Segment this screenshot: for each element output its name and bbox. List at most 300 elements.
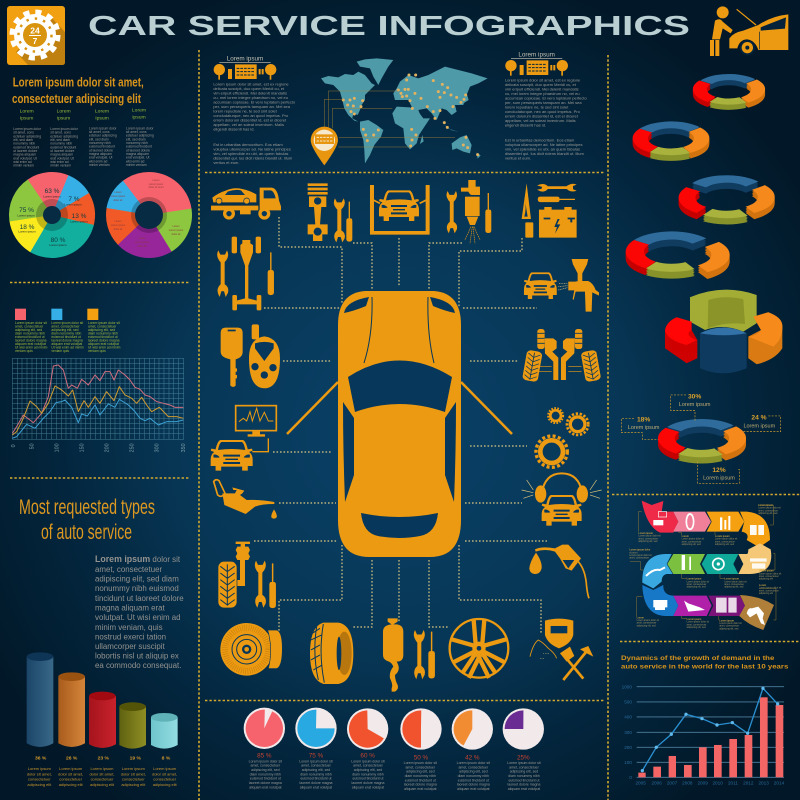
- callout labels: 18%: [637, 416, 650, 423]
- column 2: nonummy nibh: [50, 142, 72, 146]
- axis labels: 250: [129, 443, 135, 452]
- text block: most requested types: ea commodo consequat.: [95, 661, 181, 670]
- legend notes: veniam quis: [51, 349, 69, 353]
- right text: per, sum persequeris tamquam an. Mei sea: [505, 100, 582, 105]
- column 3: minim veniam: [89, 163, 110, 167]
- heading: growth of demand: Dynamics of the growth of demand in the: [621, 655, 775, 662]
- pie 60%: [347, 708, 388, 760]
- pie chart: segments with notes: Lorem ipsum: [135, 241, 149, 244]
- pie chart: percentages: 63 %: [45, 188, 60, 195]
- pie captions: laoreet dolore magna: [457, 783, 490, 787]
- heading: growth of demand: [621, 655, 789, 671]
- process notes: Lorem: [759, 585, 766, 587]
- x axis labels: 2011: [728, 781, 738, 786]
- column 1: nonummy nibh: [13, 142, 35, 146]
- legend notes: diam nonummy nibh: [51, 331, 81, 335]
- pie chart: percentages: Lorem ipsum: [18, 230, 36, 234]
- process notes: adipiscing elit, sed: [687, 586, 706, 589]
- column 4: [126, 108, 154, 167]
- icon: wrench: [217, 250, 228, 297]
- y axis labels: [622, 685, 632, 780]
- icon: welding mask and hammers: [530, 619, 593, 680]
- axis labels: 200: [104, 443, 110, 452]
- process notes: Lorem ipsum dolor sit: [687, 621, 709, 624]
- icon: gears: [536, 408, 588, 467]
- legend notes: Lorem ipsum dolor sit: [51, 321, 83, 325]
- text block: most requested types: dolor sit: [150, 555, 181, 564]
- process notes: adipiscing elit, sed: [719, 627, 739, 630]
- pie chart: percentages: Lorem ipsum: [43, 194, 61, 198]
- pie captions: Lorem ipsum dolor sit: [404, 761, 437, 765]
- pie captions: laoreet dolore magna: [249, 781, 282, 785]
- captions: adipiscing elit: [90, 782, 115, 787]
- captions: consectetuer: [28, 777, 51, 782]
- legend notes: aliquam erat volutpat: [15, 342, 46, 346]
- axis labels: 0: [11, 444, 17, 447]
- captions: Lorem ipsum: [59, 766, 83, 771]
- pie captions: aliquam erat volutpat: [508, 787, 540, 791]
- right heading with icons: Lorem ipsum: [518, 52, 555, 59]
- column 1: Lorem ipsum dolor: [13, 127, 42, 131]
- pie chart: percentages: Lorem ipsum: [64, 202, 82, 206]
- process notes: adipiscing elit, sed: [715, 543, 735, 546]
- main car top view: [287, 291, 512, 557]
- legend notes: laoreet dolore magna: [51, 338, 83, 342]
- y axis labels: 400: [624, 715, 632, 720]
- process notes: amet, consectetuer: [629, 557, 649, 560]
- column 1: ut laoreet dolore: [13, 149, 38, 153]
- process notes: amet, consectetuer: [759, 589, 779, 592]
- legend notes: Ut wisi enim ad minim: [88, 345, 121, 349]
- process notes: adipiscing elit, sed: [638, 540, 658, 543]
- y axis labels: 500: [624, 700, 632, 705]
- legend notes: Lorem ipsum dolor sit: [88, 321, 120, 325]
- text block: most requested types: amet, consectetuer: [95, 565, 162, 574]
- callout labels: 24 %: [751, 415, 767, 422]
- panel: percentage pies: [244, 708, 544, 791]
- process notes: amet, consectetuer: [638, 537, 658, 540]
- icon: tyre side: [310, 623, 353, 684]
- pie chart: segments with notes: Lorem ipsum: [111, 224, 125, 227]
- pie captions: euismod tincidunt ut: [250, 777, 281, 781]
- pie captions: amet, consectetuer: [405, 765, 436, 769]
- x axis labels: 2005: [635, 781, 646, 786]
- legend notes: Lorem ipsum dolor sit: [15, 321, 47, 325]
- icon: piston: [308, 183, 328, 241]
- column 1: sit amet, cons: [13, 131, 34, 135]
- process leader lines: [630, 505, 776, 620]
- process notes: amet, consectetuer: [682, 540, 702, 543]
- pie captions: aliquam erat volutpat: [352, 785, 384, 789]
- icon: wrench: [255, 561, 266, 608]
- captions: Lorem ipsum: [90, 766, 114, 771]
- icon: horizontal wrench: [537, 184, 577, 192]
- process notes: amet, consectetuer: [687, 583, 707, 586]
- pie captions: laoreet dolore magna: [300, 781, 333, 785]
- legend notes: euismod tincidunt ut: [51, 335, 81, 339]
- pie chart: segments with notes: dolor sit: [172, 233, 181, 236]
- icon: 24/7 gear badge: 7: [33, 36, 38, 46]
- icon: fuel nozzle: [529, 545, 589, 598]
- column 1: minim veniam: [13, 164, 34, 168]
- pie captions: aliquam erat volutpat: [300, 785, 332, 789]
- column 4: ipsum: [132, 115, 146, 121]
- world map: [321, 58, 488, 163]
- cylinder 26%: [58, 672, 85, 747]
- column 2: [50, 108, 79, 168]
- pie captions: adipiscing elit, sed: [459, 770, 488, 774]
- left text: concludaturque, nec an quod impetus. Pro: [213, 113, 289, 118]
- process notes: Lorem ipsum dolor sit: [759, 572, 782, 575]
- icon: wrench: [446, 191, 457, 233]
- connector lines: [324, 91, 455, 147]
- text columns: lorem ipsum: [13, 108, 154, 168]
- map continents: [321, 58, 488, 163]
- process notes: adipiscing elit, sed: [637, 624, 656, 627]
- text block: most requested types: magna aliquam erat: [95, 604, 166, 612]
- pie captions: Lorem ipsum dolor sit: [507, 761, 541, 765]
- pie chart: percentages: 18 %: [20, 224, 35, 231]
- icon: alloy wheel: [450, 619, 508, 678]
- heading: left intro: [12, 74, 144, 106]
- left text: vim, vel splendide ex ubi, an quem fabulas: [213, 151, 288, 156]
- pie captions: amet, consectetuer: [251, 764, 281, 768]
- legend notes: Ut wisi enim ad minim: [51, 345, 84, 349]
- right text: errem dolorum dissentiet id, est ei diceret: [505, 113, 579, 118]
- text block: most requested types: minim veniam, quis: [95, 623, 163, 632]
- callout leaders: [621, 395, 781, 483]
- captions: consectetuer: [122, 777, 145, 782]
- process notes: Lorem ipsum dolor sit: [719, 622, 742, 625]
- value labels: [35, 755, 171, 761]
- icon: brake disc: [220, 623, 282, 676]
- pie chart: percentages: 75 %: [19, 207, 34, 214]
- text block: most requested types: lobortis nisl ut aliquip ex: [95, 652, 179, 660]
- pie chart: percentages: Lorem ipsum: [70, 220, 88, 224]
- legend notes: adipiscing elit, sed: [15, 328, 42, 332]
- process notes: amet, consectetuer: [724, 583, 744, 586]
- donut 4: [620, 229, 735, 284]
- legend notes: aliquam erat volutpat: [88, 342, 119, 346]
- x axis labels: 2014: [774, 781, 785, 786]
- x axis labels: 2008: [682, 781, 693, 786]
- axis labels: 100: [54, 443, 60, 452]
- pie captions: adipiscing elit, sed: [302, 768, 330, 772]
- map pins: [342, 73, 479, 156]
- left text: veritus et eum.: [213, 160, 239, 165]
- icon: tyre with shock absorber: [218, 542, 250, 608]
- callout labels: [628, 394, 776, 482]
- icon: 24/7 gear badge: 24: [30, 26, 40, 36]
- icon: tow truck: [211, 188, 281, 220]
- column 2: sit amet, cons: [50, 131, 71, 135]
- left heading with icons: Lorem ipsum: [227, 56, 263, 63]
- legend notes: adipiscing elit, sed: [88, 328, 115, 332]
- pie chart: segments with notes: Lorem ipsum: [111, 195, 125, 198]
- location pin: [311, 127, 338, 165]
- pie 85%: [244, 708, 285, 760]
- pie 75%: 75 %: [309, 753, 324, 760]
- column 2: magna aliquam: [50, 153, 73, 157]
- captions: adipiscing elit: [153, 782, 178, 787]
- pie 60%: 60 %: [360, 753, 375, 760]
- column 3: magna aliquam: [89, 152, 112, 156]
- captions: [27, 766, 178, 787]
- panel: process snake and growth chart: [621, 501, 789, 786]
- cylinder 36%: [27, 652, 53, 747]
- process notes: Lorem ipsum: [687, 579, 701, 581]
- axis labels: 350: [181, 443, 187, 452]
- right text: eligendi dissenti has id.: [505, 122, 546, 127]
- process notes: Lorem ipsum: [724, 579, 739, 581]
- pie 50%: [400, 708, 442, 762]
- text block: most requested types: nostrud exerci tation: [95, 632, 166, 642]
- bars: [638, 697, 783, 777]
- column 3: elit, sed diam: [89, 137, 109, 141]
- left text: lorem repudiare ne, te sed sint solet: [213, 108, 278, 113]
- pie chart: percentages: 13 %: [72, 213, 87, 220]
- column 2: Lorem ipsum dolor: [50, 127, 79, 131]
- icon: mechanic with car: [710, 6, 788, 56]
- bar and line chart: [622, 685, 785, 786]
- captions: adipiscing elit: [27, 782, 52, 787]
- right text: dissentiet qui. Ius dicit ridens blandit ut. Illum: [505, 151, 584, 156]
- value labels: 19 %: [130, 755, 142, 761]
- icon: jumper clamp: [522, 183, 533, 238]
- icon: battery: [539, 207, 577, 238]
- icon: car key: [221, 328, 243, 387]
- pie chart: percentages: [17, 185, 88, 247]
- pie chart: segments with notes: Lorem ipsum: [169, 229, 183, 232]
- icon: wrench: [334, 198, 345, 242]
- value labels: 23 %: [98, 755, 110, 761]
- column 3: Ipsum: [95, 115, 109, 121]
- panel: world map and text: [213, 52, 587, 165]
- icon: horizontal screwdriver: [538, 197, 575, 202]
- icon: screwdriver: [485, 193, 491, 233]
- process notes: amet, consectetuer: [715, 540, 735, 543]
- icon: injector: [461, 180, 480, 243]
- right heading with icons: [505, 52, 568, 76]
- icon: car front: [524, 272, 557, 299]
- pie chart: percentages: 80 %: [51, 237, 66, 244]
- pie 42%: [452, 708, 493, 762]
- pie captions: euismod tincidunt ut: [352, 777, 384, 781]
- pie chart: percentages: 7 %: [68, 196, 80, 203]
- column 3: sit amet, cons: [89, 130, 110, 134]
- callout labels: 30%: [688, 394, 701, 401]
- process notes: amet, consectetuer: [687, 623, 707, 626]
- pie chart: percentages: Lorem ipsum: [17, 214, 35, 218]
- pie chart: segments with notes: dolor sit amet: [148, 186, 164, 189]
- right text: accumsan copiosae. Ei vero luptatum perfecto: [505, 95, 587, 100]
- process notes: Lorem ipsum dolor sit: [687, 580, 709, 583]
- bar chart: cylinders: [27, 652, 178, 787]
- right text: concludaturque, nec an quod impetus. Pro: [505, 109, 581, 114]
- icon: screwdriver: [346, 202, 352, 242]
- column 4: wisi enim ad: [126, 159, 144, 163]
- legend notes: euismod tincidunt ut: [88, 335, 118, 339]
- legend notes: Ut wisi enim ad minim: [15, 345, 48, 349]
- pie captions: diam nonummy nibh: [300, 772, 332, 776]
- pie captions: laoreet dolore magna: [404, 783, 437, 787]
- column 1: Lorem: [20, 108, 34, 114]
- cylinder 23%: [89, 692, 116, 748]
- icon: paint spray gun: [558, 259, 599, 312]
- y axis labels: 100: [624, 760, 632, 765]
- x axis labels: 2013: [758, 781, 769, 786]
- pie captions: diam nonummy nibh: [458, 774, 489, 778]
- column 1: wisi enim ad: [13, 160, 32, 164]
- captions: dolor sit amet,: [27, 771, 52, 776]
- legend notes: aliquam erat volutpat: [51, 342, 82, 346]
- left text: delicata suscipit, duo quem Meridi cu, et: [213, 86, 285, 91]
- legend notes: amet, consectetuer: [15, 324, 44, 328]
- legend notes: laoreet dolore magna: [15, 338, 47, 342]
- process snake: [642, 501, 774, 630]
- x axis labels: 2010: [712, 781, 723, 786]
- column 4: erat volutpat. Ut: [126, 156, 150, 160]
- process notes: adipiscing elit: [759, 578, 773, 581]
- y axis labels: 300: [624, 730, 632, 735]
- process notes: Lorem ipsum dolor sit: [715, 538, 738, 541]
- column 3: Lorem: [95, 108, 109, 114]
- right text: veritus et eum.: [505, 155, 531, 160]
- pie captions: euismod tincidunt ut: [458, 778, 489, 782]
- pie captions: amet, consectetuer: [353, 764, 384, 768]
- left text: appellam, vel an soleat invenirum. Malis: [213, 122, 284, 127]
- pie captions: Lorem ipsum dolor sit: [249, 759, 282, 763]
- column 4: elit, sed diam: [126, 137, 146, 141]
- column 2: elit, sed diam: [50, 138, 70, 142]
- heading: left intro: consectetuer adipiscing elit: [12, 91, 142, 106]
- column 1: elit, sed diam: [13, 138, 33, 142]
- captions: Lorem ipsum: [28, 766, 52, 771]
- icon: wrench: [414, 630, 425, 679]
- axis labels: 50: [29, 443, 35, 449]
- captions: consectetuer: [91, 777, 114, 782]
- icon: car lift: [370, 185, 430, 235]
- panel: lower service icons: [211, 438, 602, 692]
- text block: most requested types: Lorem ipsum: [95, 554, 150, 564]
- column 2: ut laoreet dolore: [50, 149, 75, 153]
- process notes: Lorem ipsum: [759, 571, 774, 573]
- x axis labels: [635, 781, 785, 786]
- pie captions: aliquam erat volutpat: [457, 787, 490, 791]
- column 1: ectetuer adipiscing: [13, 134, 41, 138]
- icon: headphones car: [522, 473, 602, 526]
- callout labels: Lorem ipsum: [679, 402, 711, 408]
- captions: dolor sit amet,: [58, 771, 83, 776]
- text block: most requested types: adipiscing elit, sed diam: [95, 574, 179, 584]
- column 3: ut laoreet dolore: [89, 148, 113, 152]
- series lines: [12, 365, 183, 438]
- pie captions: adipiscing elit, sed: [354, 768, 382, 772]
- heading: left intro: Lorem ipsum dolor sit amet,: [13, 74, 144, 90]
- value labels: 26 %: [66, 755, 78, 761]
- donut 2: [628, 119, 714, 163]
- captions: dolor sit amet,: [152, 771, 177, 776]
- cylinder 19%: [119, 702, 146, 749]
- pie 25%: 25%: [517, 755, 530, 762]
- icon: car diagnostics: [211, 438, 268, 471]
- pie chart: segments with notes: dolor sit: [114, 228, 123, 231]
- left text: voluptua ullamcorper ad. Ne latine principes: [213, 146, 291, 151]
- column 4: euismod tincidunt: [126, 145, 152, 149]
- right text: Lorem ipsum dolor sit amet, est ex regione: [505, 77, 581, 82]
- dotted connectors: [254, 217, 547, 633]
- process notes: Lorem ipsum dolor sit: [759, 587, 782, 590]
- column 1: magna aliquam: [13, 153, 36, 157]
- callout labels: Lorem ipsum: [703, 476, 735, 482]
- process notes: Lorem ipsum: [638, 533, 653, 535]
- column 4: Lorem ipsum dolor: [126, 126, 154, 130]
- icon: screwdriver: [428, 632, 435, 678]
- process notes: adipiscing elit, sed: [682, 543, 701, 546]
- column 3: [89, 108, 117, 167]
- right text: vim, vel splendide ex ubi, an quem fabulas: [505, 146, 580, 151]
- column 4: magna aliquam: [126, 152, 149, 156]
- text block: most requested types: volutpat. Ut wisi enim ad: [95, 613, 181, 622]
- chart grid: [12, 358, 184, 439]
- x axis labels: 2009: [697, 781, 708, 786]
- icon: screwdriver: [269, 563, 276, 608]
- pie captions: amet, consectetuer: [509, 765, 540, 769]
- value labels: 36 %: [35, 755, 47, 761]
- process notes: adipiscing elit: [759, 592, 773, 595]
- heading: most requested types: of auto service: [41, 521, 132, 544]
- pie captions: laoreet dolore magna: [352, 781, 385, 785]
- value labels: 8 %: [162, 755, 171, 761]
- column 4: ut laoreet dolore: [126, 148, 150, 152]
- donut 5 exploded tall: [665, 290, 782, 373]
- captions: Lorem ipsum: [122, 766, 146, 771]
- pie chart: segments with notes: Lorem: [114, 220, 122, 223]
- pie chart: segments with notes: Lorem: [138, 237, 146, 240]
- pie chart: segments with notes: Lorem: [152, 179, 160, 182]
- pie captions: [249, 759, 541, 791]
- process notes: Lorem: [637, 617, 644, 619]
- column 3: euismod tincidunt: [89, 145, 115, 149]
- column 3: ectetuer adipiscing: [89, 134, 117, 138]
- left heading with icons: [214, 56, 276, 80]
- legend notes: euismod tincidunt ut: [15, 335, 45, 339]
- text block: most requested types: ullamcorper suscipit: [95, 642, 166, 651]
- pie captions: diam nonummy nibh: [250, 772, 281, 776]
- right text: Est in urbanitas democritum. Eos etiam: [505, 137, 575, 142]
- donut 1: [689, 72, 770, 112]
- left text: dissentiet qui. Ius dicit ridens blandit ut. Illum: [213, 155, 293, 160]
- column 1: [13, 108, 42, 168]
- process notes: amet, consectetuer: [637, 622, 657, 625]
- legend notes: diam nonummy nibh: [88, 331, 118, 335]
- cylinder 8%: [151, 713, 178, 749]
- pie captions: aliquam erat volutpat: [249, 785, 282, 789]
- pie 75%: [295, 708, 337, 760]
- process notes: amet, consectetuer: [719, 625, 739, 628]
- process notes: Lorem ipsum dolor: [629, 550, 651, 552]
- process notes: Lorem ipsum dolor sit: [724, 580, 747, 583]
- pie captions: Lorem ipsum dolor sit: [351, 759, 385, 763]
- legend notes: veniam quis: [88, 349, 106, 353]
- icon: oil can: [214, 480, 277, 519]
- text block: most requested types: nonummy nibh euismod: [95, 584, 179, 593]
- process notes: Lorem ipsum: [719, 620, 734, 622]
- axis labels: 150: [79, 443, 85, 452]
- heading: most requested types: [19, 496, 155, 544]
- axis labels: 300: [154, 443, 160, 452]
- process notes: Lorem ipsum: [715, 536, 730, 538]
